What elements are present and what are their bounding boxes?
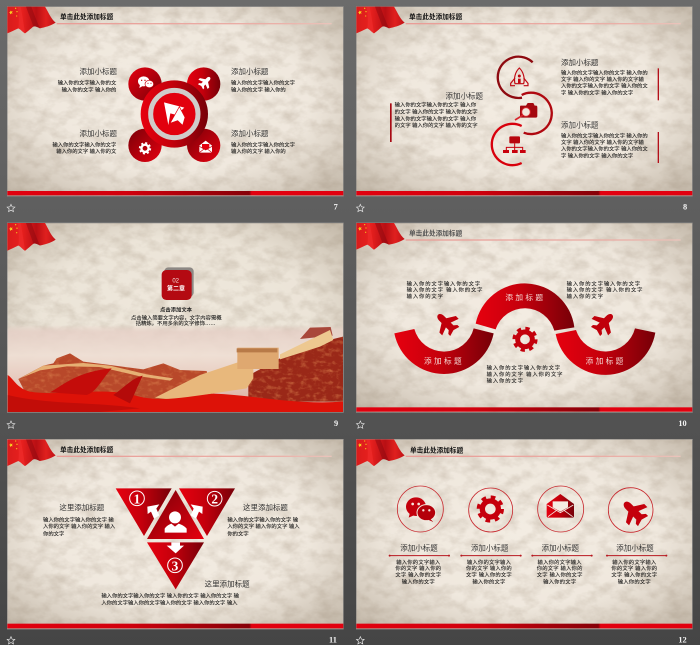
panel: slide 10 wave — [356, 223, 692, 428]
title rule — [406, 239, 681, 241]
text block top right: 文字 输入你的文字 输入你的文字输 — [561, 75, 645, 83]
text block left: 输入你的文字 — [407, 292, 444, 300]
icon: transition star — [7, 204, 15, 212]
icon: small circle envelope — [187, 129, 220, 162]
flag — [7, 223, 56, 251]
icon: plane right — [587, 307, 620, 340]
icon: transition star — [356, 421, 364, 428]
text block top left: 添加小标题 — [80, 66, 117, 76]
wave segment left — [394, 328, 494, 374]
column 2 text: 输入你的文字输入 — [467, 558, 512, 566]
icon: transition star — [356, 637, 364, 644]
text block lower right: 字 输入你的文字 输入你的文字 — [561, 151, 633, 159]
column 4 text: 添加小标题 — [616, 543, 654, 553]
text block left: 输入你的文字 输入你的文字 — [407, 286, 483, 294]
text block lower right: 入你的文字输入你的文字 输入你的文 — [561, 145, 648, 153]
paper background — [7, 439, 343, 629]
title: 单击此处添加标题 — [60, 445, 114, 454]
wave segment right: 添加标题 — [586, 355, 626, 365]
arrow right — [191, 504, 203, 519]
page number: 10 — [678, 419, 687, 428]
flag — [356, 439, 405, 466]
column 1 text: 添加小标题 — [400, 543, 438, 553]
column 3 text: 文字 输入你的文字 — [537, 571, 583, 579]
triangle 2 — [179, 488, 235, 536]
wave segment top: 添加标题 — [505, 292, 545, 302]
text block left: 你的文字 — [43, 529, 64, 537]
column 3 text: 添加小标题 — [542, 543, 580, 553]
title: 单击此处添加标题 — [409, 228, 463, 237]
column 4 text: 你的文字 输入你的 — [611, 564, 657, 572]
column 3 text: 输入你的文字 — [543, 577, 576, 585]
icon: small circle plane — [187, 67, 220, 101]
page number: 12 — [678, 636, 687, 645]
text block bottom left: 添加小标题 — [80, 128, 117, 138]
icon: transition star — [356, 204, 364, 212]
icon: transition star — [7, 637, 15, 644]
text block right: 输入你的文字 输入你的文字 — [567, 286, 643, 294]
text block top left: 输入你的文字 输入你的 — [62, 85, 116, 93]
text block bottom left: 输入你的文字 输入你的文 — [56, 147, 117, 155]
wave segment right — [556, 328, 655, 375]
title: 单击此处添加标题 — [410, 445, 464, 454]
bottom bar — [356, 407, 692, 412]
text block top right: 入你的文字输入你的文字 输入你的文 — [561, 82, 648, 90]
column 1 text: 你的文字 输入你的 — [395, 564, 441, 572]
title: 单击此处添加标题 — [60, 12, 114, 21]
column 4 text — [606, 543, 667, 585]
panel: slide 9 section divider — [7, 223, 343, 428]
text block bottom: 输入你的文字输入你的文字 输入你的文字 输入你的文字 输 — [101, 592, 240, 600]
page number: 7 — [334, 202, 338, 211]
text block lower right: 文字 输入你的文字 输入你的文字输 — [561, 138, 645, 146]
column 2 text: 你的文字 输入你的 — [466, 564, 512, 572]
column 1 text: 文字 输入你的文字 — [395, 571, 441, 579]
text block right: 这里添加标题 — [243, 502, 288, 512]
text block left: 添加小标题 — [446, 90, 483, 100]
icon: chat in circle — [397, 486, 443, 532]
great wall landscape — [8, 325, 343, 412]
icon: gear in circle — [469, 488, 513, 532]
side bar lower right — [658, 132, 659, 163]
triangle 3: 3 — [172, 558, 179, 573]
text block left: 的文字 输入你的文字 输入你的文字 — [395, 108, 478, 116]
text block right: 输入你的文字输入你的文字 输 — [227, 515, 299, 523]
column 1 text: 输入你的文字输入 — [396, 558, 441, 566]
section badge — [162, 267, 194, 300]
panel: slide 8 linked arcs — [356, 7, 692, 212]
arc with camera icon — [515, 93, 552, 134]
text block left: 输入你的文字输入你的文字 输入你 — [395, 114, 477, 122]
text block right: 输入你的文字 — [567, 292, 604, 300]
column 3 text: 输入你的文字输入 — [538, 558, 582, 566]
icon: transition star — [7, 421, 15, 428]
text block centre: 输入你的文字输入你的文字 — [487, 364, 561, 372]
triangle 3 — [147, 542, 204, 589]
icon: gear — [514, 329, 536, 350]
side bar top right — [658, 68, 659, 100]
icon: plane in circle — [608, 488, 653, 532]
column 3 text: 你的文字 输入你的 — [537, 564, 583, 572]
text block lower right: 输入你的文字输入你的文字 输入你的 — [561, 131, 648, 139]
text block right: 入你的文字 输入你的文字 输入 — [227, 522, 300, 530]
arrow left — [147, 504, 159, 519]
paper background — [7, 7, 343, 196]
column 4 text: 输入你的文字输入 — [612, 558, 657, 566]
text block top right: 添加小标题 — [561, 57, 599, 67]
panel: slide 7 radial icons — [7, 7, 343, 212]
icon: small circle chat — [128, 67, 162, 101]
panel: slide 11 triangles — [7, 439, 343, 645]
text block left: 输入你的文字输入你的文字 — [407, 279, 481, 287]
text block right: 你的文字 — [227, 529, 249, 537]
arc with org chart icon — [492, 124, 526, 165]
wave segment top — [476, 283, 574, 331]
text block left: 输入你的文字输入你的文字 输 — [43, 515, 114, 523]
text block top left: 输入你的文字输入你的文 — [58, 79, 117, 87]
paper background — [356, 223, 692, 412]
flag — [356, 7, 405, 33]
text block top right: 字 输入你的文字 输入你的文字 — [561, 88, 633, 96]
paper background — [7, 223, 343, 412]
column 2 text: 输入你的文字 — [472, 577, 506, 585]
section badge: 02 — [172, 279, 180, 285]
page number: 8 — [683, 202, 687, 211]
column 4 text: 输入你的文字 — [618, 577, 651, 585]
triangle 2: 2 — [211, 492, 218, 507]
flag — [7, 7, 56, 33]
text block left: 入你的文字 输入你的文字 输入 — [43, 522, 116, 530]
text block bottom right: 输入你的文字输入你的文字 — [231, 140, 295, 148]
title rule — [57, 23, 332, 24]
text block top right: 输入你的文字输入你的文字 输入你的 — [561, 68, 648, 76]
page number: 11 — [329, 636, 337, 645]
title rule — [57, 456, 332, 457]
text block centre: 输入你的文字 输入你的文字 — [487, 370, 563, 378]
paper background — [356, 439, 692, 629]
panel: slide 12 four columns — [356, 439, 692, 645]
flag — [7, 439, 56, 466]
column 2 text: 添加小标题 — [471, 543, 509, 553]
text block bottom right: 输入你的文字 输入你的 — [231, 147, 286, 155]
title rule — [406, 456, 681, 457]
column 3 text — [531, 543, 593, 585]
text block bottom: 入你的文字输入你的文字输入你的文字 输入你的文字 输入 — [101, 599, 238, 607]
text block top right: 输入你的文字输入你的文字 — [231, 79, 295, 87]
icon: envelope in circle — [538, 486, 584, 532]
text block bottom left: 输入你的文字输入你的文字 — [52, 140, 116, 148]
triangle centre with person — [147, 490, 204, 539]
paper background — [356, 7, 692, 196]
page number: 9 — [334, 419, 338, 428]
side bar left — [390, 103, 392, 142]
text block left: 输入你的文字输入你的文字 输入你 — [395, 101, 477, 109]
centre badge — [141, 80, 208, 148]
text block bottom right: 添加小标题 — [231, 128, 269, 138]
text block top right: 添加小标题 — [231, 66, 269, 76]
bottom bar — [7, 624, 343, 628]
column 2 text: 文字 输入你的文字 — [466, 571, 512, 579]
icon: plane left — [430, 307, 463, 340]
text block left: 的文字 输入你的文字 输入你的文字 — [395, 121, 478, 129]
text block left: 这里添加标题 — [59, 502, 105, 512]
text block lower right: 添加小标题 — [561, 119, 599, 129]
caption: 点击输入简要文字内容，文字内容需概 — [131, 313, 222, 321]
arc with rocket icon — [498, 57, 533, 98]
column 1 text — [389, 543, 450, 585]
bottom bar — [356, 191, 692, 195]
text block top right: 输入你的文字 输入你的 — [231, 85, 286, 93]
title: 单击此处添加标题 — [409, 12, 463, 21]
section badge: 第二章 — [167, 284, 185, 292]
title rule — [406, 23, 681, 24]
text block right: 输入你的文字输入你的文字 — [567, 279, 641, 287]
caption: 括精炼，不用多余的文字修饰…… — [136, 319, 216, 327]
column 2 text — [460, 543, 522, 585]
bottom bar — [7, 191, 343, 195]
caption: 点击添加文本 — [160, 306, 193, 314]
wave segment left: 添加标题 — [424, 355, 464, 365]
arrow down — [167, 542, 184, 553]
text block bottom: 这里添加标题 — [205, 579, 250, 589]
triangle 1 — [116, 488, 172, 536]
bottom bar — [356, 624, 692, 628]
icon: small circle gear — [128, 129, 162, 162]
flag — [356, 223, 405, 250]
text block centre: 输入你的文字 — [487, 377, 524, 385]
column 1 text: 输入你的文字 — [402, 577, 435, 585]
column 4 text: 文字 输入你的文字 — [611, 571, 657, 579]
triangle 1: 1 — [134, 491, 140, 506]
